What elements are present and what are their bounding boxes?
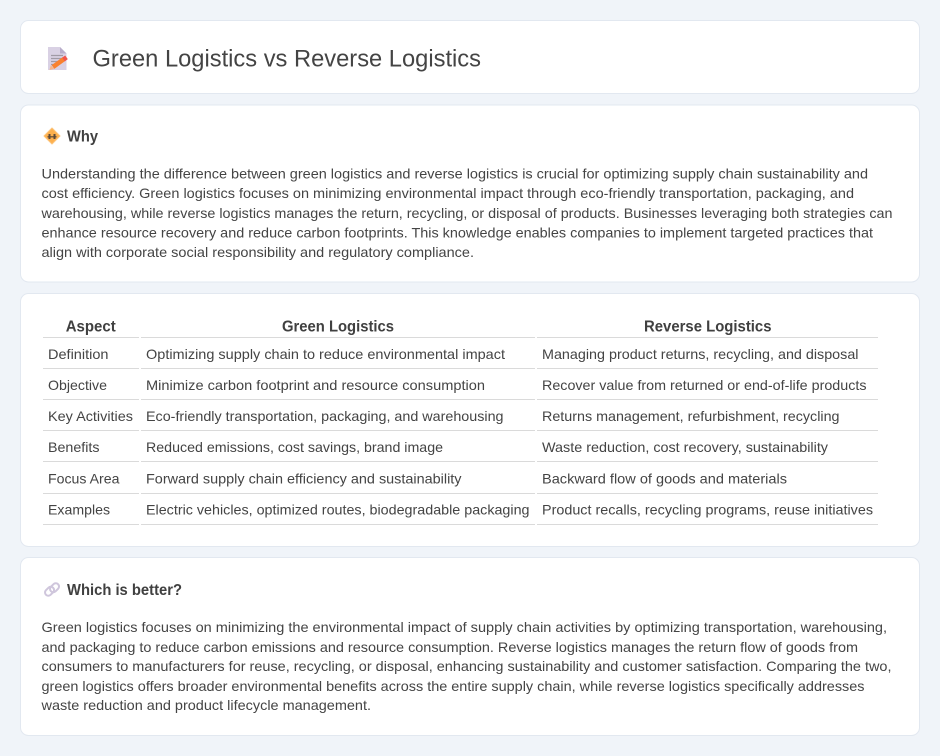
icon: diamond sign	[44, 128, 60, 144]
table row: focus area: Backward flow of goods and materials	[542, 470, 787, 486]
table header row: Green Logistics	[282, 318, 394, 336]
table row: benefits: Reduced emissions, cost savings, brand image	[146, 439, 443, 455]
text block: which is better body: green logistics offers broader environmental benefits across the entire supply chain, while reverse logistics specifically addresses	[42, 678, 864, 694]
table row: key activities: Returns management, refurbishment, recycling	[542, 408, 840, 424]
text block: why body: cost efficiency. Green logistics focuses on minimizing environmental impact through eco-friendly transportation, packaging, and	[42, 185, 854, 201]
text block: which is better body: and packaging to reduce carbon emissions and resource consumption. Reverse logistics manages the return flow of goods from	[42, 639, 858, 655]
text block: why body: enhance resource recovery and reduce carbon footprints. This knowledge enables companies to implement targeted practices that	[42, 224, 873, 240]
table row: definition	[43, 346, 878, 368]
table row: examples: Product recalls, recycling programs, reuse initiatives	[542, 502, 873, 518]
table row: benefits: Benefits	[48, 439, 100, 455]
title: Green Logistics vs Reverse Logistics	[92, 46, 481, 72]
table row: benefits: Waste reduction, cost recovery, sustainability	[542, 439, 828, 455]
panel: why	[20, 105, 920, 282]
table row: examples	[43, 502, 878, 524]
table row: objective: Minimize carbon footprint and resource consumption	[146, 377, 485, 393]
table row: key activities	[43, 408, 878, 430]
table header row: Reverse Logistics	[644, 318, 772, 336]
text block: which is better body	[40, 619, 891, 713]
table row: key activities: Key Activities	[48, 408, 133, 424]
table row: objective: Objective	[48, 377, 107, 393]
table row: focus area: Focus Area	[48, 470, 120, 486]
table row: key activities: Eco-friendly transportation, packaging, and warehousing	[146, 408, 504, 424]
text block: why body: align with corporate social responsibility and regulatory compliance.	[42, 244, 474, 260]
table row: definition: Managing product returns, recycling, and disposal	[542, 346, 858, 362]
icon: link	[44, 582, 60, 597]
heading: why: Why	[67, 128, 98, 146]
table row: benefits	[43, 439, 878, 462]
panel: header	[20, 20, 920, 94]
table row: examples: Electric vehicles, optimized routes, biodegradable packaging	[146, 502, 530, 518]
text block: which is better body: consumers to manufacturers for reuse, recycling, or disposal, enhancing sustainability and customer satisfaction. Comparing the two,	[42, 658, 891, 674]
table row: objective	[43, 377, 878, 400]
icon: document with pencil	[48, 47, 66, 70]
text block: which is better body: waste reduction and product lifecycle management.	[40, 697, 371, 713]
text block: why body: Understanding the difference between green logistics and reverse logistics is crucial for optimizing supply chain sustainability and	[42, 166, 868, 182]
text block: which is better body: Green logistics focuses on minimizing the environmental impact of supply chain activities by optimizing transportation, warehousing,	[42, 619, 887, 635]
heading: which is better: Which is better?	[67, 582, 182, 599]
panel: comparison table	[20, 294, 920, 546]
table row: focus area	[43, 470, 878, 494]
table row: definition: Definition	[48, 346, 108, 362]
text block: why body	[40, 166, 893, 260]
table row: focus area: Forward supply chain efficiency and sustainability	[146, 470, 462, 486]
table header row	[43, 318, 878, 338]
table header row: Aspect	[66, 318, 116, 336]
table row: examples: Examples	[48, 502, 110, 518]
table row: objective: Recover value from returned or end-of-life products	[542, 377, 866, 393]
panel: which is better	[20, 558, 920, 736]
text block: why body: warehousing, while reverse logistics manages the return, recycling, or disposal of products. Businesses leveraging both strategies can	[40, 205, 893, 221]
table row: definition: Optimizing supply chain to reduce environmental impact	[146, 346, 505, 362]
